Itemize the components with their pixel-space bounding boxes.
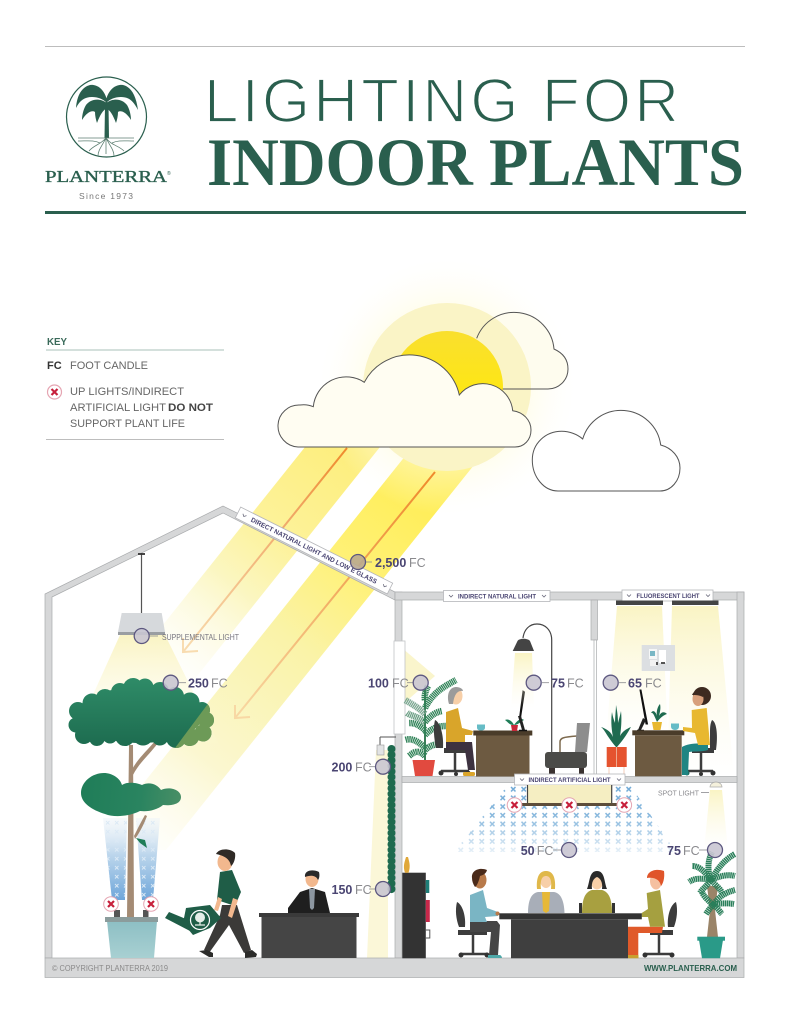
website: WWW.PLANTERRA.COM (644, 963, 737, 973)
chair right (650, 902, 677, 935)
reading: 50 FC: 50 (521, 844, 535, 858)
fixtures (616, 600, 663, 605)
key panel: UP LIGHTS/INDIRECT (70, 386, 184, 398)
chair (434, 720, 470, 753)
reading: 150 FC: 150 (332, 883, 352, 897)
header bottom rule (45, 211, 746, 214)
reading: 75 FC floor lamp (526, 675, 584, 690)
seated woman (682, 743, 708, 775)
arrow: left beam ray (183, 448, 347, 652)
cup (671, 724, 679, 730)
reading: 75 FC floor lamp: 75 (551, 676, 565, 690)
reading: 250 FC (163, 675, 228, 690)
label: direct natural light (235, 507, 393, 594)
reading: 200 FC (332, 759, 390, 774)
reception desk with person (259, 870, 359, 958)
desk (473, 730, 532, 736)
label: fluorescent light (622, 590, 713, 601)
copyright: © COPYRIGHT PLANTERRA 2019 (52, 964, 169, 973)
watering can (165, 905, 221, 935)
reading: 100 FC: 100 (368, 676, 389, 690)
meeting group (456, 869, 677, 958)
logo: Planterra (45, 77, 171, 201)
label: fluorescent light: FLUORESCENT LIGHT (636, 593, 700, 600)
logo: Planterra: PLANTERRA (45, 167, 167, 186)
light beam: right (90, 440, 494, 850)
green wall light (367, 750, 388, 958)
fixture (528, 785, 612, 803)
reading: 75 FC spot light: 75 (667, 844, 681, 858)
label: indirect artificial light: INDIRECT ARTIFICIAL LIGHT (528, 777, 610, 784)
reading: 2,500 FC: 2,500 (375, 556, 406, 570)
palm plant in red pot (405, 680, 456, 776)
red pot plant (601, 705, 631, 747)
title line one: LIGHTING FOR (204, 67, 679, 136)
reading: 65 FC (603, 675, 662, 690)
pot (107, 921, 157, 958)
desk plant (652, 722, 662, 730)
reading: 150 FC (332, 882, 390, 897)
spot light: SPOT LIGHT (658, 788, 699, 798)
cloud: main (278, 355, 531, 447)
reading: 250 FC: 250 (188, 676, 209, 690)
reading: 200 FC: FC (355, 760, 372, 774)
reading: 75 FC floor lamp: FC (567, 676, 584, 690)
chair left (456, 902, 487, 935)
window light wedge (402, 648, 435, 705)
monitor (520, 691, 524, 718)
logo: Planterra: ® (167, 170, 171, 177)
header top rule (45, 46, 745, 47)
label: indirect artificial light (514, 774, 625, 785)
reading: 50 FC (521, 842, 576, 858)
floor lamp (511, 624, 552, 776)
man in blue (470, 921, 500, 955)
indoor tree (68, 678, 214, 958)
key panel: KEY (47, 337, 67, 348)
reading: 2,500 FC (350, 554, 426, 570)
uplight cone: left (103, 818, 127, 900)
building walls (45, 506, 744, 978)
key panel: DO NOT (168, 402, 213, 414)
bookcase (402, 857, 430, 958)
reading: 100 FC: FC (392, 676, 409, 690)
reading: supplemental light (134, 628, 239, 644)
key panel (46, 337, 224, 440)
crossed out fixture: centre (562, 798, 577, 812)
room: fluorescent light (601, 600, 734, 776)
reading: 250 FC: FC (211, 676, 228, 690)
label: indirect natural light: INDIRECT NATURAL LIGHT (458, 594, 536, 600)
lower canopy (81, 773, 181, 816)
reading: 100 FC (368, 675, 428, 690)
uplight cone: right (136, 818, 160, 900)
uplight fixtures (114, 910, 148, 917)
indirect artificial uplight field (454, 785, 676, 852)
uplight x marks (103, 818, 160, 900)
light beam: left (59, 447, 380, 755)
sun with glow (319, 259, 575, 515)
notice board (642, 645, 675, 671)
title line two: INDOOR PLANTS (207, 124, 744, 200)
potted plant on desk (511, 725, 518, 731)
cloud: right (532, 410, 680, 491)
meeting table (499, 913, 642, 919)
reading: 200 FC: 200 (332, 760, 352, 774)
person watering (165, 849, 257, 958)
crossed out fixture: left (507, 798, 522, 812)
supplemental light cone (68, 635, 222, 750)
upper canopy (68, 678, 214, 748)
woman in grey (528, 892, 564, 913)
leaf on trunk (136, 838, 147, 848)
cup (477, 724, 485, 730)
crossed out uplight: right (144, 897, 158, 911)
reading: 75 FC spot light: FC (683, 844, 700, 858)
key panel: FC (47, 360, 62, 372)
spot light (658, 782, 728, 850)
seated man (446, 742, 475, 770)
reading: 150 FC: FC (355, 883, 372, 897)
reading: 75 FC spot light (667, 842, 722, 858)
green wall (377, 737, 396, 892)
logo: Planterra: Since 1973 (79, 191, 133, 201)
arrow: right beam ray (235, 472, 435, 718)
reading: 2,500 FC: FC (409, 556, 426, 570)
cloud: back (477, 312, 568, 389)
tree trunk and branches (127, 741, 158, 917)
reading: 50 FC: FC (537, 844, 553, 858)
armchair (545, 723, 590, 774)
room: indirect natural light (405, 680, 532, 776)
supplemental lamp (118, 553, 165, 635)
chair (692, 720, 717, 753)
man in olive (628, 927, 663, 955)
fluorescent beams (606, 606, 668, 740)
monitor (640, 690, 648, 724)
palm plant right (689, 852, 735, 958)
crossed out fixture: right (617, 798, 632, 812)
reading: 65 FC: 65 (628, 676, 642, 690)
reading: 65 FC: FC (645, 676, 662, 690)
desk (632, 730, 684, 735)
glass window (394, 641, 405, 734)
reading: supplemental light: SUPPLEMENTAL LIGHT (162, 633, 239, 642)
crossed out uplight: left (104, 897, 118, 911)
key panel: FOOT CANDLE (70, 360, 148, 372)
key panel: SUPPORT PLANT LIFE (70, 418, 185, 430)
label: direct natural light: DIRECT NATURAL LIGHT AND LOW E GLASS (249, 517, 378, 586)
label: indirect natural light (444, 590, 550, 602)
key panel: ARTIFICIAL LIGHT (70, 402, 166, 414)
woman in olive (579, 903, 615, 913)
